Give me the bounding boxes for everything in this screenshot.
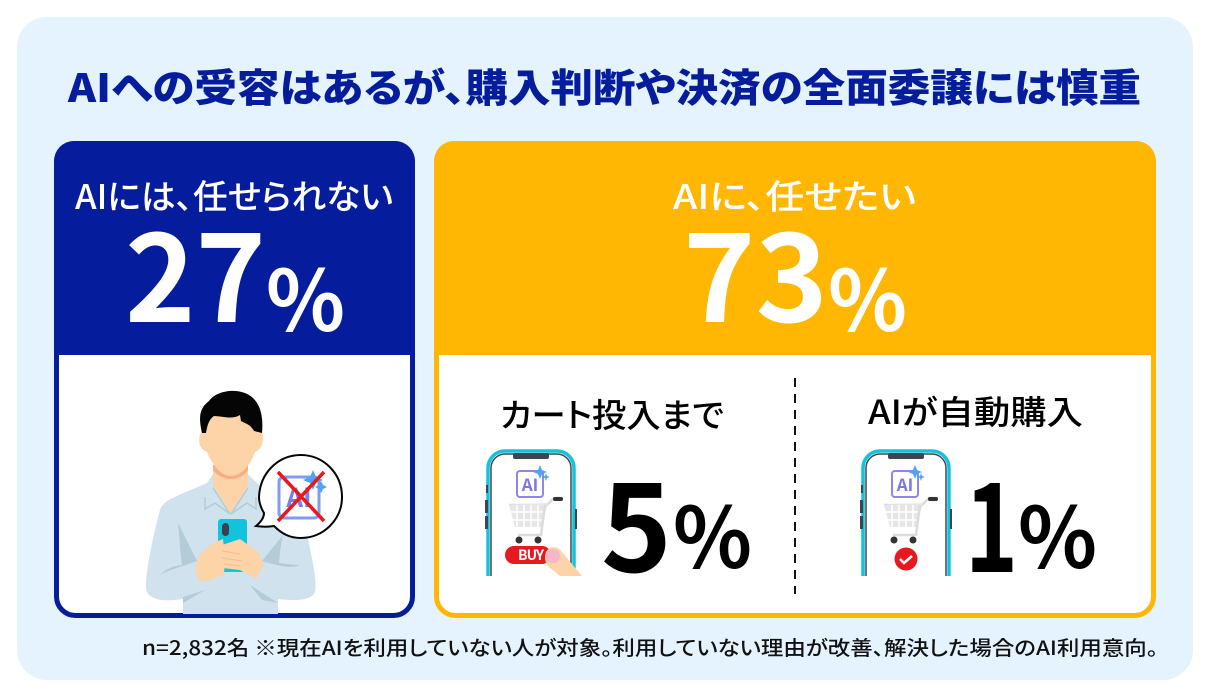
stat: 5% [601, 433, 752, 607]
stat: 1% [965, 433, 1097, 607]
hands [196, 539, 225, 581]
stat: 5%: 5 [601, 433, 672, 607]
speech bubble with crossed AI: AI [285, 478, 312, 515]
stat: 27%: % [266, 235, 345, 356]
panel header: blue [54, 141, 415, 355]
head [199, 415, 263, 476]
stat: 5%: % [673, 472, 752, 593]
sub-heading: AI auto purchase: AIが自動購入 [868, 386, 1083, 434]
stat: 73%: 73 [683, 183, 828, 357]
icon: phone with cart and buy button: AI [521, 471, 538, 496]
illustration: man holding phone [146, 391, 342, 614]
icon: phone with cart and check mark [860, 451, 952, 576]
stat: 1%: 1 [965, 433, 1018, 607]
panel header: amber [434, 141, 1156, 355]
collar [205, 488, 256, 514]
stat: 27%: 27 [125, 183, 266, 357]
stat: 73%: % [828, 235, 907, 356]
panel: want to entrust to AI [434, 141, 1156, 616]
icon: phone with cart and check mark: AI [896, 471, 913, 496]
phone [218, 519, 247, 572]
speech bubble with crossed AI [256, 455, 342, 538]
sub-heading: up to cart: カート投入まで [500, 389, 724, 437]
stat: 73% [683, 183, 907, 357]
shirt [146, 474, 316, 614]
stat: 1%: % [1018, 472, 1097, 593]
neck [213, 465, 248, 514]
stat: 27% [125, 183, 345, 357]
panel: cannot entrust to AI [54, 141, 415, 616]
hair [200, 391, 262, 433]
heading: cannot entrust: AIには、任せられない [75, 170, 393, 219]
heading: want to entrust: AIに、任せたい [673, 170, 916, 219]
shirt shadows [160, 523, 300, 603]
icon: phone with cart and buy button: BUY [518, 545, 545, 565]
title: AIへの受容はあるが、購入判断や決済の全面委譲には慎重 [67, 58, 1141, 114]
icon: phone with cart and buy button [485, 451, 582, 576]
footnote: n=2,832名 ※現在AIを利用していない人が対象。利用していない理由が改善、解決した場合のAI利用意向。 [142, 632, 1158, 661]
dashed divider [794, 378, 796, 594]
